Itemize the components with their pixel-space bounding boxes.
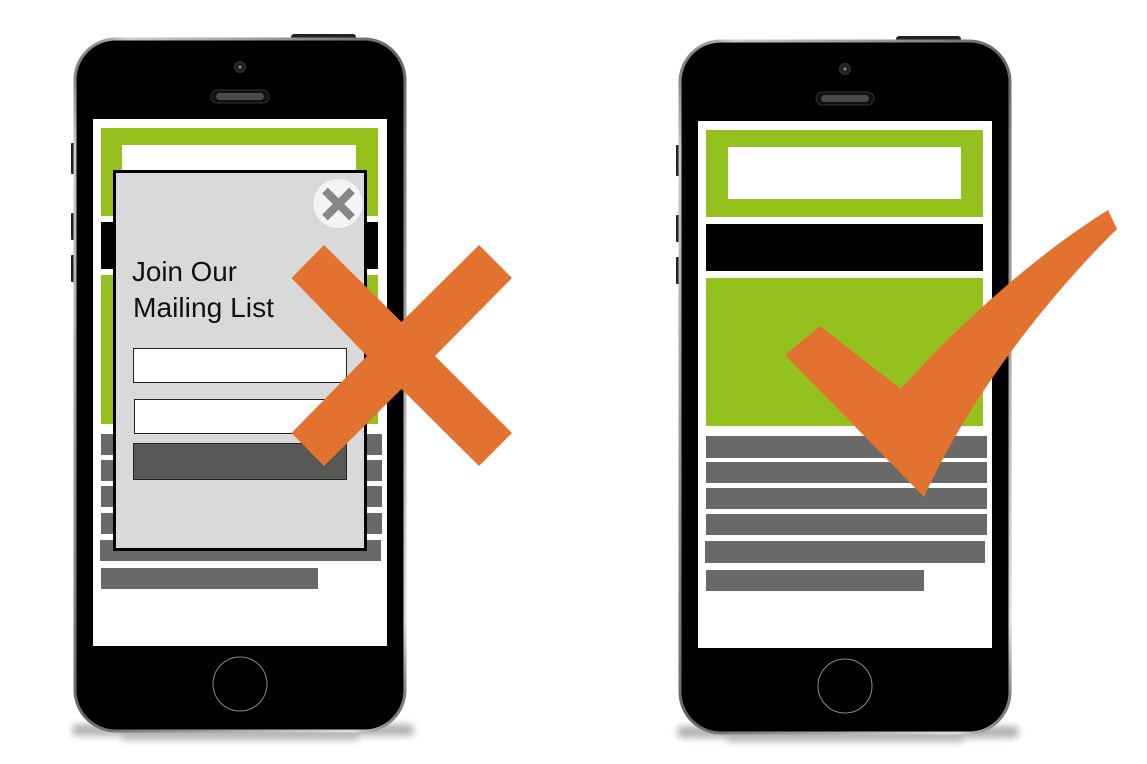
input one — [134, 348, 346, 382]
phone body — [75, 39, 405, 731]
home button — [213, 657, 267, 711]
text lines — [705, 436, 987, 591]
header banner — [101, 128, 378, 216]
phone: left, with popup — [71, 34, 512, 740]
black nav bar — [706, 224, 983, 271]
speaker — [816, 92, 874, 105]
side buttons — [71, 34, 356, 282]
orange cross — [292, 245, 512, 466]
orange check mark — [785, 210, 1117, 497]
hero block — [101, 275, 378, 424]
popup heading — [132, 256, 274, 323]
phone body — [680, 41, 1010, 733]
camera — [840, 64, 850, 74]
popup heading: Mailing List — [133, 292, 274, 323]
popup heading: Join Our — [132, 256, 237, 287]
page mockup: right — [705, 130, 987, 591]
side buttons — [676, 36, 961, 284]
screen — [93, 119, 387, 646]
page mockup: left — [100, 128, 382, 589]
phone shadow — [72, 724, 414, 740]
popup panel — [114, 172, 366, 550]
popup box — [114, 172, 366, 550]
phone shadow — [677, 726, 1019, 742]
close icon — [314, 179, 362, 228]
input two — [134, 400, 346, 434]
black nav bar — [101, 222, 378, 269]
home button — [818, 659, 872, 713]
hero block — [706, 278, 983, 426]
speaker — [211, 90, 269, 103]
submit button — [134, 444, 346, 480]
camera — [234, 62, 246, 72]
phone: right, without popup — [676, 36, 1117, 742]
header banner — [706, 130, 983, 217]
screen — [698, 121, 992, 648]
text lines — [100, 434, 382, 589]
